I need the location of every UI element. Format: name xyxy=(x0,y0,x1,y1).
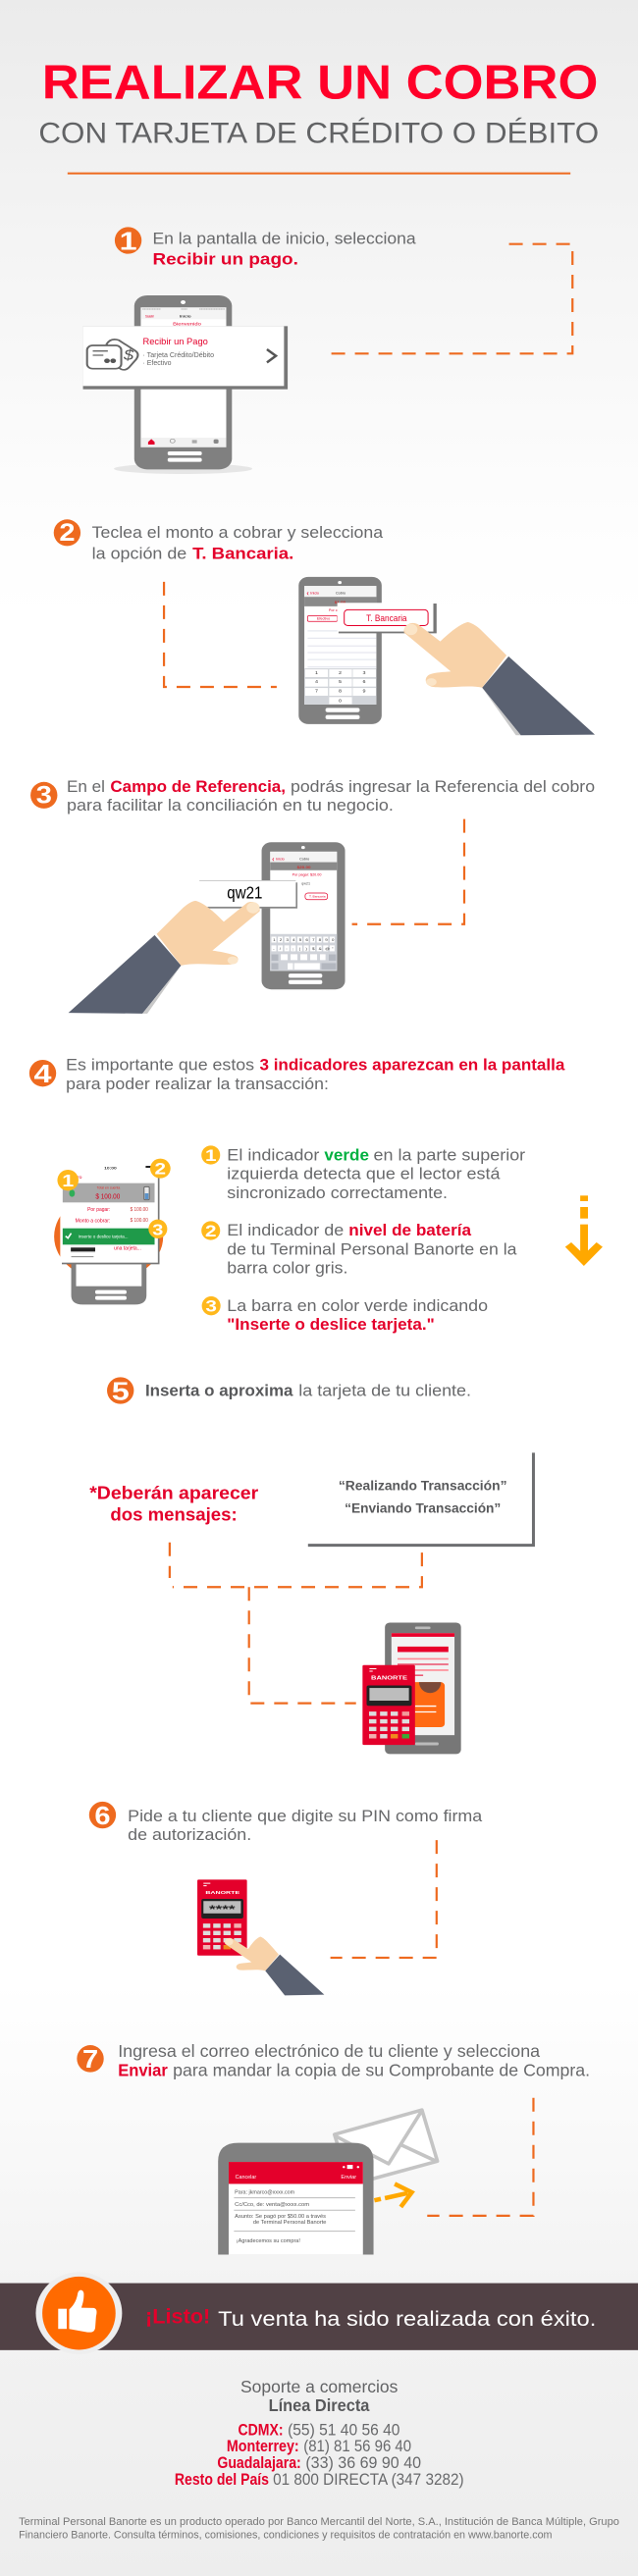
phone: amount screen: 0 xyxy=(339,699,342,704)
phone: email screen: Enviar xyxy=(341,2175,356,2181)
step 3 text: podrás ingresar la Referencia del cobro xyxy=(291,777,595,796)
indicator item 2: barra color gris. xyxy=(227,1259,347,1278)
note: two messages: dos mensajes: xyxy=(110,1505,238,1525)
support phone numbers xyxy=(175,2420,464,2489)
phone: home screen: Bienvenido xyxy=(173,322,201,327)
phone with terminal xyxy=(362,1622,461,1754)
popup: qw21 field: qw21 xyxy=(227,883,262,903)
phone: email screen: Cc/Cco, de: venta@xxxx.com xyxy=(235,2202,309,2208)
phone: reference keyboard: ❮ Inicio xyxy=(272,858,285,861)
indicator item 3 xyxy=(202,1296,488,1334)
note: two messages: *Deberán aparecer xyxy=(89,1484,259,1503)
phone: amount screen: 2 xyxy=(339,670,342,676)
support heading xyxy=(240,2378,398,2415)
icon: thumbs up xyxy=(35,2272,122,2354)
message box xyxy=(308,1452,533,1546)
popup: T. Bancaria button xyxy=(338,603,437,633)
step 5 text: Inserta o aproxima xyxy=(145,1382,293,1400)
banner: Tu venta ha sido realizada con éxito. xyxy=(218,2306,596,2331)
step 1 badge: 1 xyxy=(120,227,137,256)
phone: reference keyboard: T. Bancaria xyxy=(309,895,326,899)
terminal device: BANORTE xyxy=(371,1676,407,1681)
step 2 text: T. Bancaria. xyxy=(192,545,293,562)
icon: envelope xyxy=(335,2110,438,2185)
phone with indicators: una tarjeta... xyxy=(114,1246,141,1251)
phone: home screen: Inicio xyxy=(180,314,191,318)
support heading: Soporte a comercios xyxy=(240,2378,398,2396)
step 3 text: En el xyxy=(67,777,105,796)
step 2 text xyxy=(92,523,384,562)
phone: home screen: Salir xyxy=(145,314,155,318)
phone: amount screen: 8 xyxy=(339,689,342,694)
note: two messages xyxy=(89,1484,259,1525)
step 5 text: la tarjeta de tu cliente. xyxy=(298,1382,471,1400)
step 1 text: Recibir un pago. xyxy=(152,250,298,269)
popup card: recibir un pago: · Efectivo xyxy=(143,359,172,367)
indicator item 1: 1 xyxy=(205,1146,217,1165)
support phone numbers: Monterrey: xyxy=(227,2437,299,2455)
section: messages and step 6 xyxy=(89,1452,533,1995)
step 4 badge xyxy=(29,1060,56,1088)
hand pressing keypad xyxy=(225,1936,324,1995)
dashed connector 7 xyxy=(427,2098,533,2216)
indicator badge 1 on phone: 1 xyxy=(62,1172,74,1190)
indicator badge 2 on phone: 2 xyxy=(155,1160,166,1178)
section: step 4 and 5 xyxy=(29,1056,603,1406)
indicator item 3: "Inserte o deslice tarjeta." xyxy=(227,1316,435,1334)
step 7 text xyxy=(118,2042,590,2079)
phone: reference keyboard: $20.00 xyxy=(297,865,311,869)
phone: email screen: de Terminal Personal Banorte xyxy=(253,2220,326,2226)
phone: home screen xyxy=(114,295,252,474)
phone: amount screen: Efectivo xyxy=(317,617,330,620)
step 4 text: 3 indicadores aparezcan en la pantalla xyxy=(259,1056,565,1075)
indicator item 2 xyxy=(201,1221,517,1278)
section: steps 2 and 3 xyxy=(30,518,595,1014)
support heading: Línea Directa xyxy=(269,2396,370,2415)
step 1 text xyxy=(152,230,416,269)
step 6 text: de autorización. xyxy=(128,1825,251,1844)
step 3 text: para facilitar la conciliación en tu negocio. xyxy=(67,796,394,815)
phone: reference keyboard: -/:;()$&@" xyxy=(273,946,334,951)
step 6 badge: 6 xyxy=(94,1801,111,1829)
step 2 text: la opción de xyxy=(92,545,186,562)
arrow: send xyxy=(374,2183,412,2207)
support phone numbers: CDMX: xyxy=(239,2420,284,2439)
icon: payment cards xyxy=(87,340,137,370)
support phone numbers: Resto del País xyxy=(175,2470,269,2489)
indicator item 1: El indicador xyxy=(227,1146,320,1165)
indicator item 2: El indicador de xyxy=(227,1222,344,1239)
phone: reference keyboard: Por pagar: $20.00 xyxy=(292,873,321,876)
indicator item 1: en la parte superior xyxy=(374,1146,526,1165)
popup card: recibir un pago xyxy=(83,326,288,390)
indicator item 3: 3 xyxy=(205,1297,217,1315)
dashed connector 6 xyxy=(331,1840,437,1958)
step 4 text: para poder realizar la transacción: xyxy=(66,1076,329,1093)
phone with indicators: $ 100.00 xyxy=(95,1191,120,1200)
phone with indicators: Inserte o deslice tarjeta... xyxy=(79,1235,129,1239)
step 4 text: Es importante que estos xyxy=(66,1056,254,1075)
step 2 text: Teclea el monto a cobrar y selecciona xyxy=(92,523,384,542)
phone with indicators: $ 100.00 xyxy=(131,1218,148,1224)
section: step 7 and footer xyxy=(0,2042,638,2541)
phone with indicators: ro xyxy=(78,1175,82,1181)
phone: email screen: Asunto: Se pagó por $50.00 a través xyxy=(235,2214,326,2220)
phone: amount screen: 1 xyxy=(315,670,318,676)
support phone numbers: Guadalajara: xyxy=(217,2453,301,2472)
phone: amount screen: 7 xyxy=(315,689,318,694)
phone: email screen: Cancelar xyxy=(236,2175,256,2181)
phone: amount screen: 5 xyxy=(339,679,342,685)
step 3 badge xyxy=(30,780,57,809)
phone: amount screen: Cobro xyxy=(336,592,346,596)
step 4 text xyxy=(66,1056,565,1093)
dashed connector 3 xyxy=(352,819,464,924)
phone: email screen: ¡Agradecemos su compra! xyxy=(237,2238,300,2244)
phone: amount screen: $1.00 xyxy=(335,600,346,605)
indicator badge 3 on phone xyxy=(148,1220,167,1238)
step 3 text xyxy=(67,777,595,815)
indicator badge 3 on phone: 3 xyxy=(152,1221,163,1238)
message box: “Realizando Transacción” xyxy=(339,1478,507,1494)
phone: reference keyboard: qw21 xyxy=(301,882,310,885)
phone: amount screen: 3 xyxy=(363,670,366,676)
phone: amount screen: ❮ Inicio xyxy=(306,592,319,596)
phone with indicators: Por pagar: xyxy=(87,1207,111,1213)
banner xyxy=(0,2272,638,2354)
step 5 text xyxy=(145,1382,471,1400)
popup: T. Bancaria button: T. Bancaria xyxy=(366,613,407,624)
phone: amount screen: 6 xyxy=(363,679,366,685)
popup: qw21 field xyxy=(199,880,297,909)
terminal with PIN: **** xyxy=(209,1904,236,1916)
disclaimer xyxy=(19,2517,619,2541)
banner: ¡Listo! xyxy=(145,2304,210,2328)
phone: reference keyboard: 1234567890 xyxy=(273,937,335,942)
phone with indicators: Total en cuenta xyxy=(97,1185,121,1190)
phone: amount screen: 9 xyxy=(363,689,366,694)
phone with indicators: $ 100.00 xyxy=(131,1207,148,1213)
section: header and step 1 xyxy=(38,55,599,474)
dashed connector 1 xyxy=(324,244,572,353)
step 7 text: para mandar la copia de su Comprobante de Compra. xyxy=(173,2061,590,2079)
phone: email screen xyxy=(218,2143,374,2254)
hand tapping qw21 xyxy=(69,901,260,1014)
step 6 text: Pide a tu cliente que digite su PIN como firma xyxy=(128,1807,483,1825)
indicator item 1: izquierda detecta que el lector está xyxy=(227,1165,501,1183)
popup card: recibir un pago: Recibir un Pago xyxy=(143,337,208,347)
phone: reference keyboard: Cobro xyxy=(299,858,309,861)
indicator item 2: nivel de batería xyxy=(348,1222,471,1239)
support phone numbers: 01 800 DIRECTA (347 3282) xyxy=(273,2470,464,2489)
indicator item 1: verde xyxy=(324,1146,369,1165)
dashed connector 2 xyxy=(164,582,277,687)
step 7 badge xyxy=(77,2045,104,2074)
phone with indicators xyxy=(53,1159,171,1304)
dashed connectors xyxy=(170,1543,422,1704)
hand tapping T. Bancaria xyxy=(404,622,595,735)
step 2 badge: 2 xyxy=(59,518,75,547)
phone with indicators: Monto a cobrar: xyxy=(76,1219,111,1224)
terminal with PIN: BANORTE xyxy=(205,1890,240,1896)
disclaimer: Financiero Banorte. Consulta términos, comisiones, condiciones y requisitos de contratación en www.banorte.com xyxy=(19,2530,553,2541)
step 2 badge xyxy=(54,518,80,547)
indicator badge 1 on phone xyxy=(57,1170,79,1190)
phone with indicators: 10:00 xyxy=(104,1166,117,1170)
support phone numbers: (81) 81 56 96 40 xyxy=(303,2437,411,2455)
step 5 badge xyxy=(107,1377,133,1406)
phone: amount screen: 4 xyxy=(315,679,318,685)
step 4 badge: 4 xyxy=(34,1060,52,1088)
indicator item 1: sincronizado correctamente. xyxy=(227,1184,448,1202)
phone: reference keyboard xyxy=(262,842,346,989)
step 1 badge xyxy=(115,227,141,256)
indicator item 1 xyxy=(201,1145,526,1202)
step 1 text: En la pantalla de inicio, selecciona xyxy=(152,230,416,248)
message box: “Enviando Transacción” xyxy=(345,1500,501,1516)
terminal with PIN xyxy=(197,1879,247,1956)
indicator item 3: La barra en color verde indicando xyxy=(227,1297,488,1315)
step 7 text: Ingresa el correo electrónico de tu cliente y selecciona xyxy=(118,2042,541,2061)
indicator badge 2 on phone xyxy=(150,1159,171,1179)
step 3 text: Campo de Referencia, xyxy=(110,777,286,796)
step 6 text xyxy=(128,1807,483,1844)
support phone numbers: (55) 51 40 56 40 xyxy=(288,2420,399,2439)
popup card: recibir un pago: · Tarjeta Crédito/Débito xyxy=(143,351,214,359)
arrow: down xyxy=(565,1195,603,1266)
step 7 badge: 7 xyxy=(82,2045,98,2074)
phone: amount screen: Por co xyxy=(329,608,340,612)
step 6 badge xyxy=(89,1801,116,1829)
step 7 text: Enviar xyxy=(118,2061,168,2079)
support phone numbers: (33) 36 69 90 40 xyxy=(305,2453,421,2472)
phone: amount screen xyxy=(298,577,382,724)
step 5 badge: 5 xyxy=(112,1377,130,1406)
phone: email screen: Para: jkmarco@xxxx.com xyxy=(235,2190,295,2195)
indicator item 2: de tu Terminal Personal Banorte en la xyxy=(227,1240,517,1259)
indicator item 2: 2 xyxy=(205,1222,217,1240)
step 3 badge: 3 xyxy=(36,780,52,809)
popup card: recibir un pago: $ xyxy=(123,346,134,363)
